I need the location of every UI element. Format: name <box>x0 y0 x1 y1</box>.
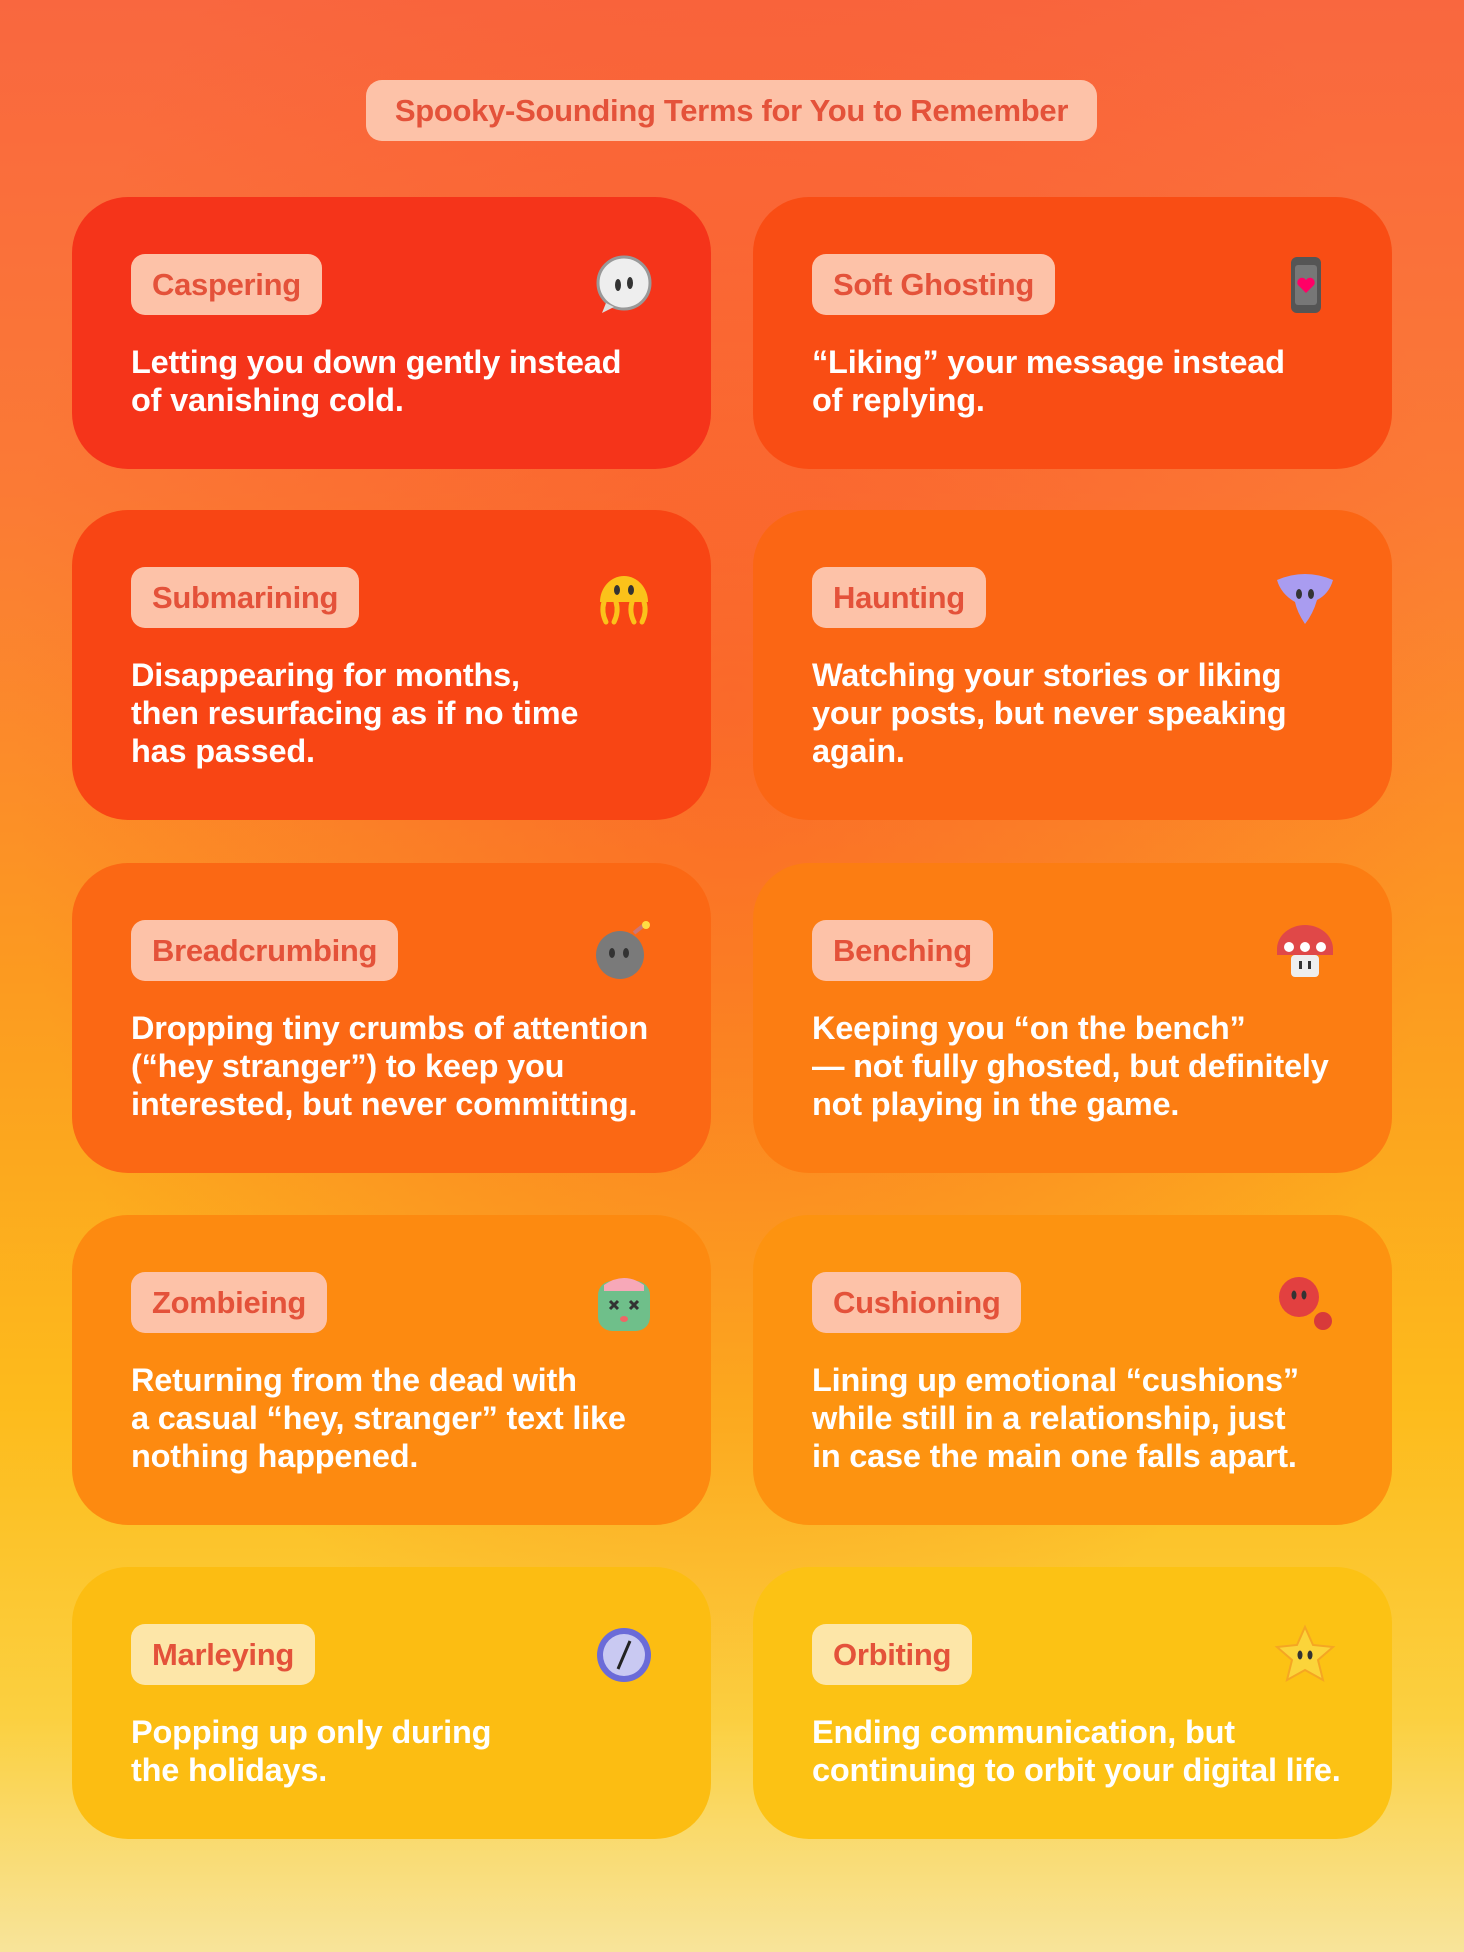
panel: benching <box>753 863 1392 1173</box>
description <box>131 1010 648 1122</box>
description <box>812 344 1285 418</box>
panel: cushioning <box>753 1215 1392 1525</box>
description: continuing to orbit your digital life. <box>812 1752 1341 1788</box>
icon: bomb <box>596 921 650 979</box>
icon: phone heart <box>1291 257 1321 313</box>
description <box>812 657 1286 769</box>
label: marleying <box>131 1624 315 1685</box>
icon: star <box>1274 1625 1336 1682</box>
description: your posts, but never speaking <box>812 695 1286 731</box>
label: soft ghosting <box>812 254 1055 315</box>
description: Keeping you “on the bench” <box>812 1010 1246 1046</box>
description <box>131 1362 626 1474</box>
description: a casual “hey, stranger” text like <box>131 1400 626 1436</box>
description: of vanishing cold. <box>131 382 404 418</box>
description: has passed. <box>131 733 315 769</box>
panel: haunting <box>753 510 1392 820</box>
panel: soft ghosting <box>753 197 1392 469</box>
label: marleying: Marleying <box>152 1636 294 1672</box>
panel: zombieing <box>72 1215 711 1525</box>
label: zombieing: Zombieing <box>152 1284 306 1320</box>
description: in case the main one falls apart. <box>812 1438 1297 1474</box>
icon: virus blobs <box>1279 1277 1332 1330</box>
panel: caspering <box>72 197 711 469</box>
description: then resurfacing as if no time <box>131 695 578 731</box>
description <box>131 1714 491 1788</box>
description: while still in a relationship, just <box>812 1400 1285 1436</box>
panel: submarining <box>72 510 711 820</box>
label: caspering: Caspering <box>152 266 301 302</box>
icon: zombie head <box>598 1278 650 1331</box>
label: soft ghosting: Soft Ghosting <box>833 266 1034 302</box>
label: breadcrumbing: Breadcrumbing <box>152 932 377 968</box>
title: Spooky-Sounding Terms for You to Remember <box>395 92 1068 128</box>
description: Popping up only during <box>131 1714 491 1750</box>
description <box>131 344 621 418</box>
icon: mushroom <box>1277 925 1333 977</box>
panel: breadcrumbing <box>72 863 711 1173</box>
description <box>131 657 578 769</box>
description: Letting you down gently instead <box>131 344 621 380</box>
description <box>812 1714 1341 1788</box>
description: of replying. <box>812 382 985 418</box>
description: (“hey stranger”) to keep you <box>131 1048 564 1084</box>
icon: ghost face <box>596 256 652 313</box>
label: orbiting: Orbiting <box>833 1636 951 1672</box>
label: submarining: Submarining <box>152 580 338 614</box>
description: not playing in the game. <box>812 1086 1179 1122</box>
description: Ending communication, but <box>812 1714 1235 1750</box>
label: benching <box>812 920 993 981</box>
description: “Liking” your message instead <box>812 344 1285 380</box>
icon: tornado ghost <box>1277 574 1333 624</box>
panel: orbiting <box>753 1567 1392 1839</box>
label: submarining <box>131 567 359 628</box>
description: Disappearing for months, <box>131 657 520 693</box>
description: again. <box>812 733 905 769</box>
icon: jellyfish <box>600 576 648 624</box>
description: — not fully ghosted, but definitely <box>812 1048 1329 1084</box>
description: nothing happened. <box>131 1438 418 1474</box>
label: cushioning <box>812 1272 1021 1333</box>
description: Returning from the dead with <box>131 1362 577 1398</box>
description: the holidays. <box>131 1752 327 1788</box>
title <box>366 80 1097 141</box>
label: haunting <box>812 567 986 628</box>
label: cushioning: Cushioning <box>833 1284 1000 1320</box>
label: orbiting <box>812 1624 972 1685</box>
description: interested, but never committing. <box>131 1086 637 1122</box>
description: Lining up emotional “cushions” <box>812 1362 1299 1398</box>
label: haunting: Haunting <box>833 580 965 614</box>
panel: marleying <box>72 1567 711 1839</box>
description <box>812 1362 1299 1474</box>
label: caspering <box>131 254 322 315</box>
description: Dropping tiny crumbs of attention <box>131 1010 648 1046</box>
description <box>812 1010 1329 1122</box>
label: zombieing <box>131 1272 327 1333</box>
icon: clock <box>597 1628 651 1682</box>
label: benching: Benching <box>833 932 972 968</box>
description: Watching your stories or liking <box>812 657 1281 693</box>
label: breadcrumbing <box>131 920 398 981</box>
